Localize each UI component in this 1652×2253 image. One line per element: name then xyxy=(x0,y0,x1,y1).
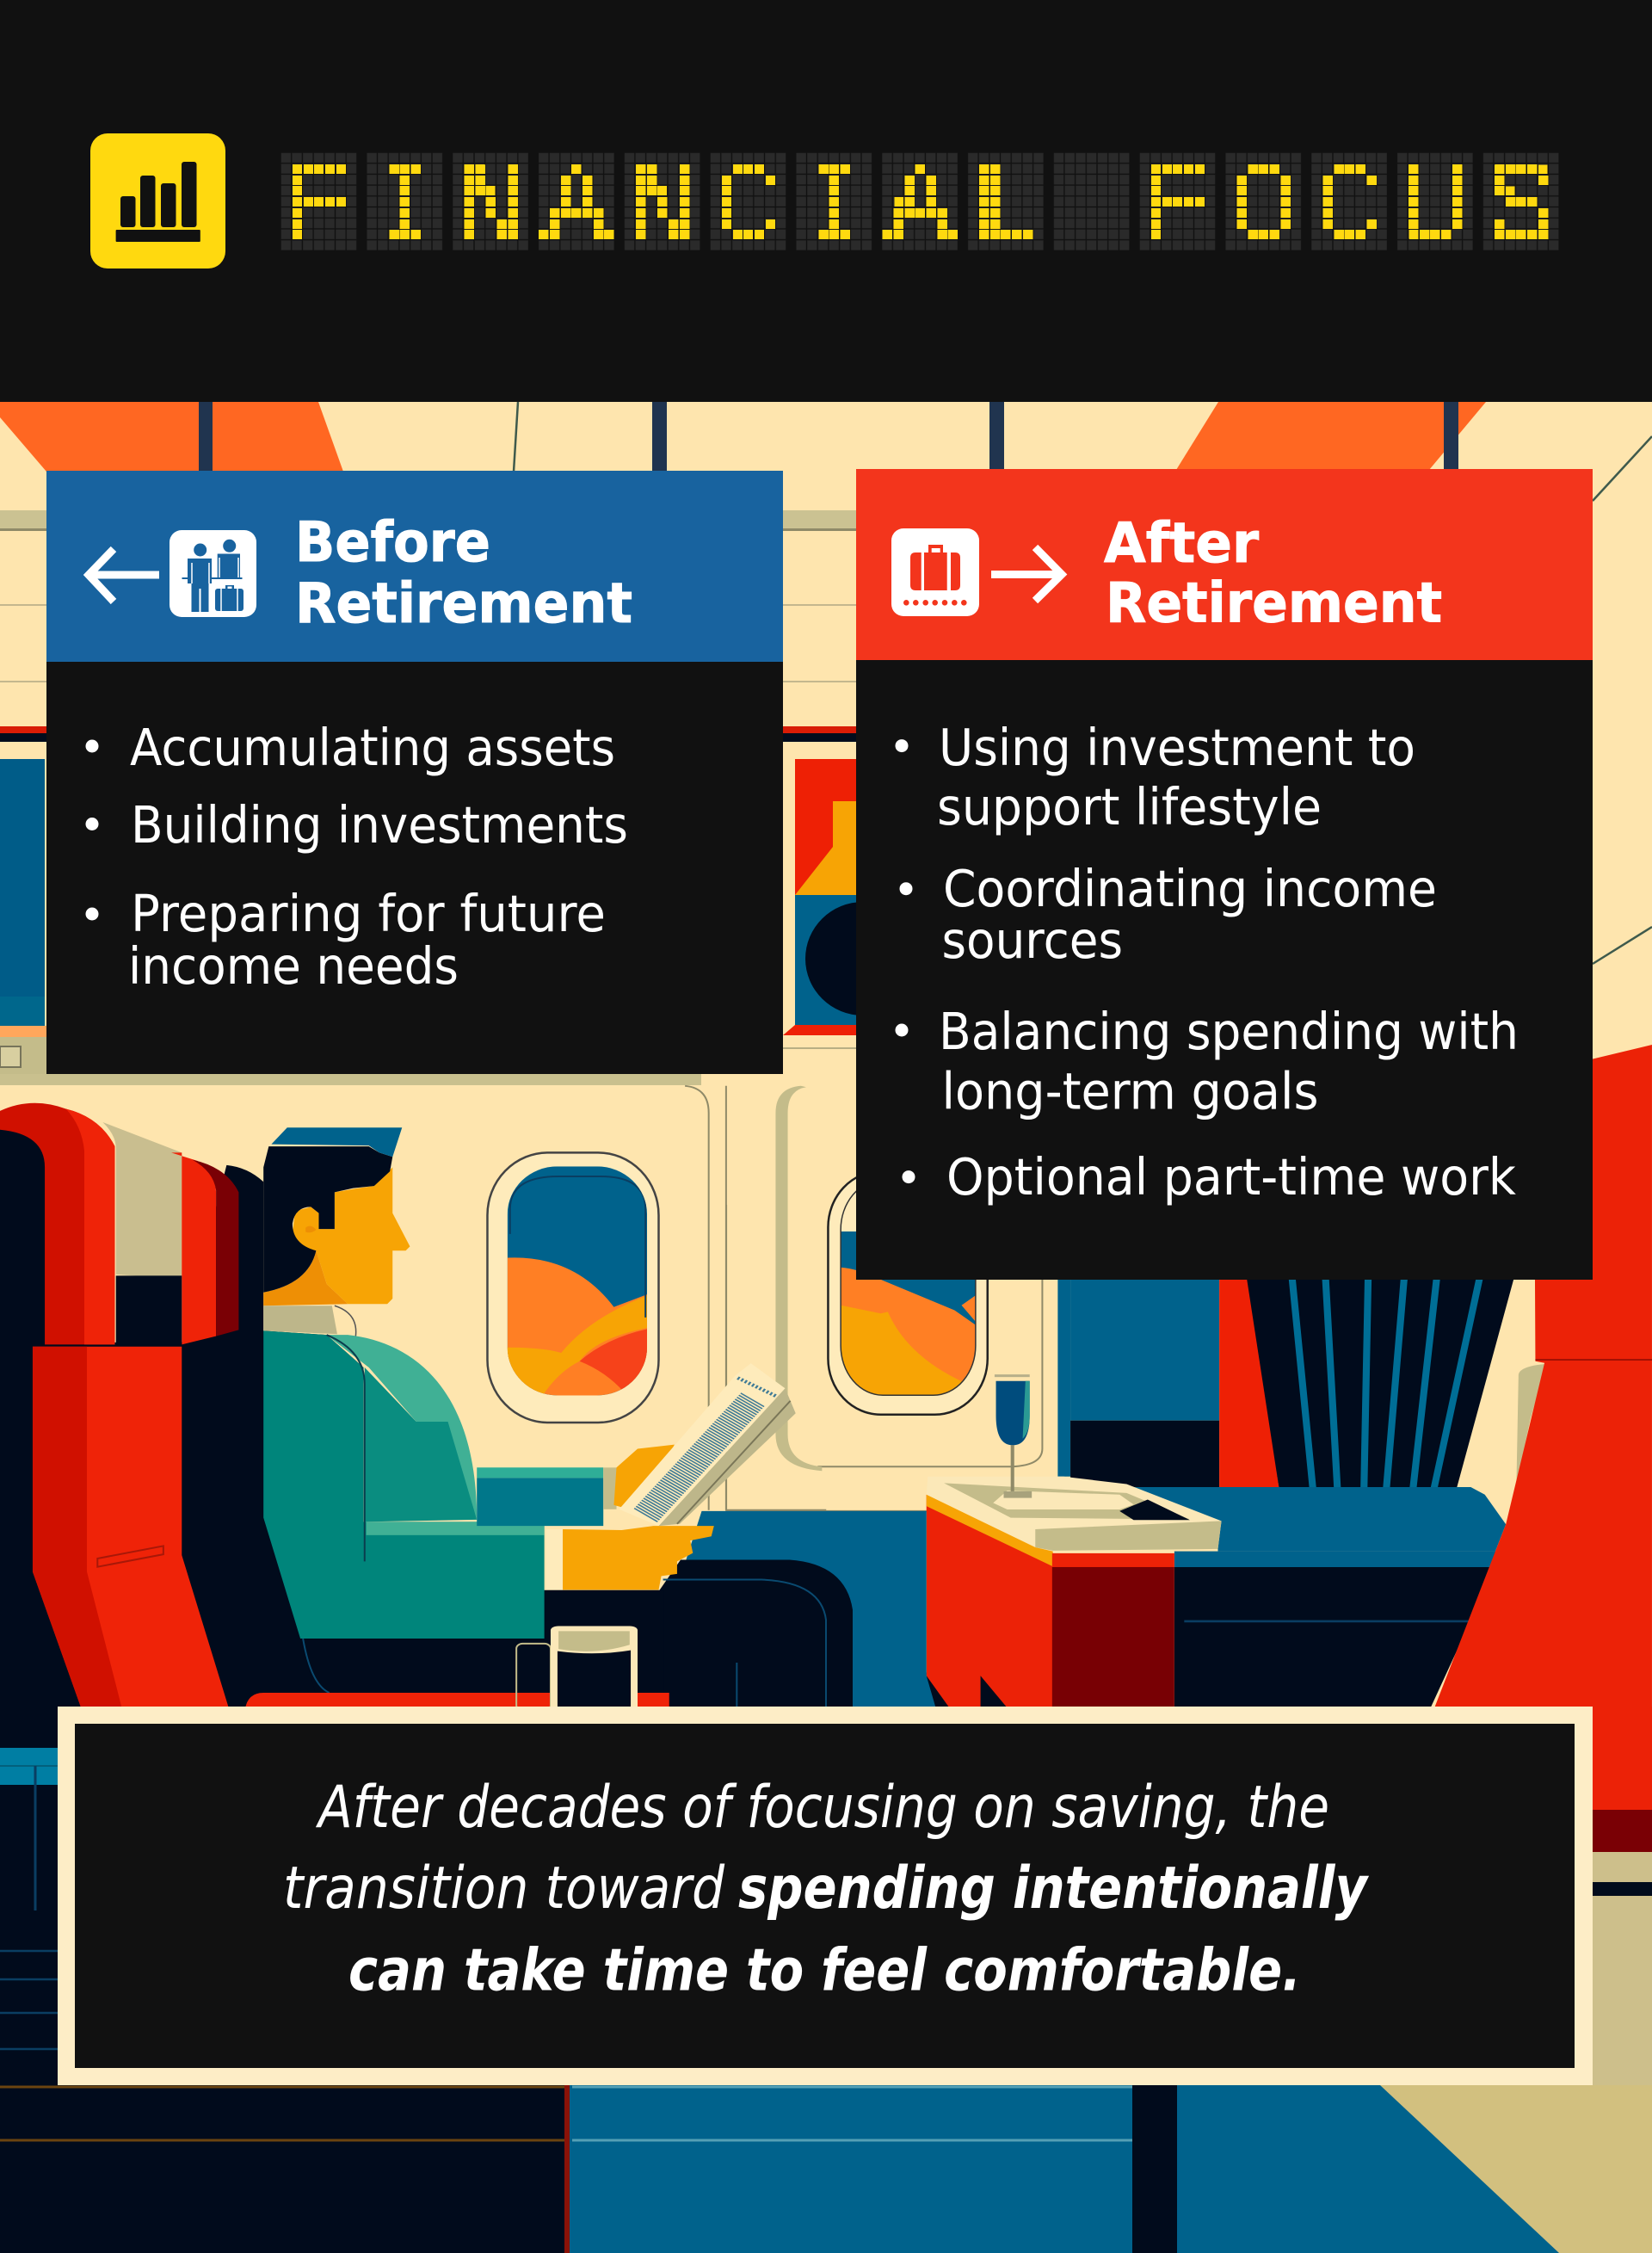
red figure in aisle xyxy=(1425,1045,1652,1731)
title: departure board FINANCIAL FOCUS: F xyxy=(284,145,354,275)
callout dark interior xyxy=(75,1724,1575,2068)
after bullet list: Coordinating income xyxy=(943,859,1437,918)
cuff xyxy=(546,1529,563,1589)
title: departure board FINANCIAL FOCUS: F xyxy=(1143,145,1212,275)
before bullet list: Accumulating assets xyxy=(130,718,615,777)
after heading: Retirement xyxy=(1106,571,1442,635)
wine glass xyxy=(995,1374,1032,1498)
title: departure board FINANCIAL FOCUS: S xyxy=(1486,145,1556,275)
callout text: After decades of focusing on saving, the xyxy=(316,1774,1329,1842)
floor at bottom xyxy=(0,2085,1652,2253)
before heading: Before xyxy=(295,511,490,575)
ceiling thin line xyxy=(514,402,1652,964)
blue wall below window xyxy=(670,1511,937,1712)
title: departure board FINANCIAL FOCUS: C xyxy=(1315,145,1384,275)
arrow: left xyxy=(89,549,159,602)
after heading: After xyxy=(1104,512,1259,576)
after heading xyxy=(1104,512,1442,635)
title: departure board FINANCIAL FOCUS: N xyxy=(627,145,697,275)
wall panel details xyxy=(685,1086,826,1510)
callout text: can take time to feel comfortable. xyxy=(348,1936,1301,2005)
lower body xyxy=(300,1590,664,1735)
left side seat, passenger and window xyxy=(0,1086,826,1735)
title: departure board FINANCIAL FOCUS: I xyxy=(812,145,855,275)
red curtain side xyxy=(1219,1205,1279,1488)
geometric wall art xyxy=(779,759,921,1049)
lower-left dark floor detail xyxy=(0,1700,60,2096)
passenger legs xyxy=(544,1560,853,1712)
blue partition xyxy=(1057,1205,1219,1488)
after bullet list: Balancing spending with xyxy=(939,1002,1519,1061)
after bullet list: sources xyxy=(941,910,1123,970)
after body background xyxy=(856,660,1593,1280)
after bullet list: Optional part-time work xyxy=(946,1147,1516,1207)
before heading xyxy=(295,511,632,636)
title: departure board FINANCIAL FOCUS: U xyxy=(1401,145,1470,275)
after header band xyxy=(856,469,1593,660)
title: departure board FINANCIAL FOCUS: I xyxy=(383,145,426,275)
after bullet list: support lifestyle xyxy=(937,777,1322,836)
icon: baggage carousel xyxy=(891,528,979,616)
callout text xyxy=(283,1774,1369,2005)
icon: people with luggage xyxy=(170,530,256,617)
title: departure board FINANCIAL FOCUS: A xyxy=(885,145,955,275)
after bullet list: long-term goals xyxy=(941,1062,1318,1120)
near hand xyxy=(563,1526,714,1589)
ear inner xyxy=(305,1226,316,1232)
collar xyxy=(263,1306,337,1334)
before bullet list: income needs xyxy=(128,936,459,996)
armrest xyxy=(245,1693,669,1709)
overhead bin band xyxy=(0,510,895,742)
header band xyxy=(0,0,1652,402)
passenger xyxy=(263,1127,796,1735)
panel: before retirement xyxy=(46,471,783,1074)
before bullet list: Preparing for future xyxy=(131,884,606,943)
second window xyxy=(828,1171,988,1415)
logo: yellow bar chart tile xyxy=(90,133,225,269)
magazine xyxy=(620,1363,796,1526)
title: departure board FINANCIAL FOCUS: A xyxy=(542,145,612,275)
right side of cabin xyxy=(544,1045,1652,1731)
after bullet list xyxy=(895,718,1519,1207)
curtain xyxy=(1236,1205,1534,1488)
before header band xyxy=(46,471,783,662)
left blue wall panel xyxy=(0,759,52,1076)
lower olive wall band xyxy=(0,1074,701,1085)
arrow: right xyxy=(991,547,1062,601)
collar curve line xyxy=(335,1306,356,1336)
neck xyxy=(263,1250,348,1306)
after bullet list: Using investment to xyxy=(939,718,1415,777)
orange ceiling shape left xyxy=(0,402,343,472)
right edge strip xyxy=(1593,1707,1652,2093)
jacket xyxy=(263,1330,545,1639)
side table xyxy=(927,1477,1222,1712)
title: departure board FINANCIAL FOCUS: L xyxy=(971,145,1040,275)
callout cream frame xyxy=(58,1707,1593,2085)
face xyxy=(293,1167,410,1304)
far sleeve xyxy=(477,1467,603,1478)
before bullet list xyxy=(86,718,628,996)
title: departure board FINANCIAL FOCUS: O xyxy=(1229,145,1298,275)
sign support struts xyxy=(199,402,1458,472)
first window xyxy=(487,1152,659,1423)
before body background xyxy=(46,662,783,1074)
before bullet list: Building investments xyxy=(131,795,628,855)
far hand xyxy=(613,1445,675,1507)
panel: after retirement xyxy=(856,469,1593,1280)
olive door edge xyxy=(1516,1364,1546,1485)
wall panel lines xyxy=(726,1205,1042,1511)
before heading: Retirement xyxy=(295,572,632,636)
callout text: spending intentionally xyxy=(738,1855,1369,1923)
drink glass xyxy=(516,1626,638,1712)
title: departure board FINANCIAL FOCUS xyxy=(280,145,1559,275)
hair highlight xyxy=(271,1127,402,1157)
title: departure board FINANCIAL FOCUS: N xyxy=(456,145,525,275)
blue seat xyxy=(1126,1487,1506,1712)
orange ceiling shape right xyxy=(1176,402,1486,470)
seat xyxy=(0,1103,364,1735)
callout text: transition toward xyxy=(283,1855,725,1923)
title: departure board FINANCIAL FOCUS: C xyxy=(713,145,783,275)
hair xyxy=(263,1146,392,1293)
callout: closing quote xyxy=(58,1707,1593,2085)
